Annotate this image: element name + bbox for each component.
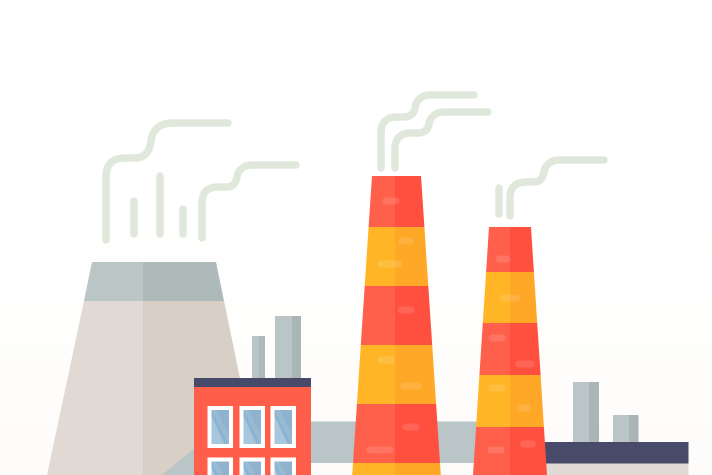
short striped chimney	[473, 227, 547, 475]
smoke: tall chimney	[381, 95, 488, 168]
smoke: short chimney	[499, 160, 604, 216]
horizontal pipe	[310, 422, 485, 463]
smoke: cooling tower	[106, 123, 296, 240]
cooling tower	[47, 262, 260, 475]
chimney highlights	[488, 256, 536, 454]
windows	[208, 406, 296, 475]
diagonal pipe	[162, 447, 196, 475]
building roof	[194, 378, 311, 387]
right building	[540, 382, 688, 475]
tall striped chimney	[352, 176, 441, 475]
chimney highlights	[366, 198, 422, 454]
small chimneys on red building	[252, 316, 301, 379]
red building	[194, 378, 311, 475]
